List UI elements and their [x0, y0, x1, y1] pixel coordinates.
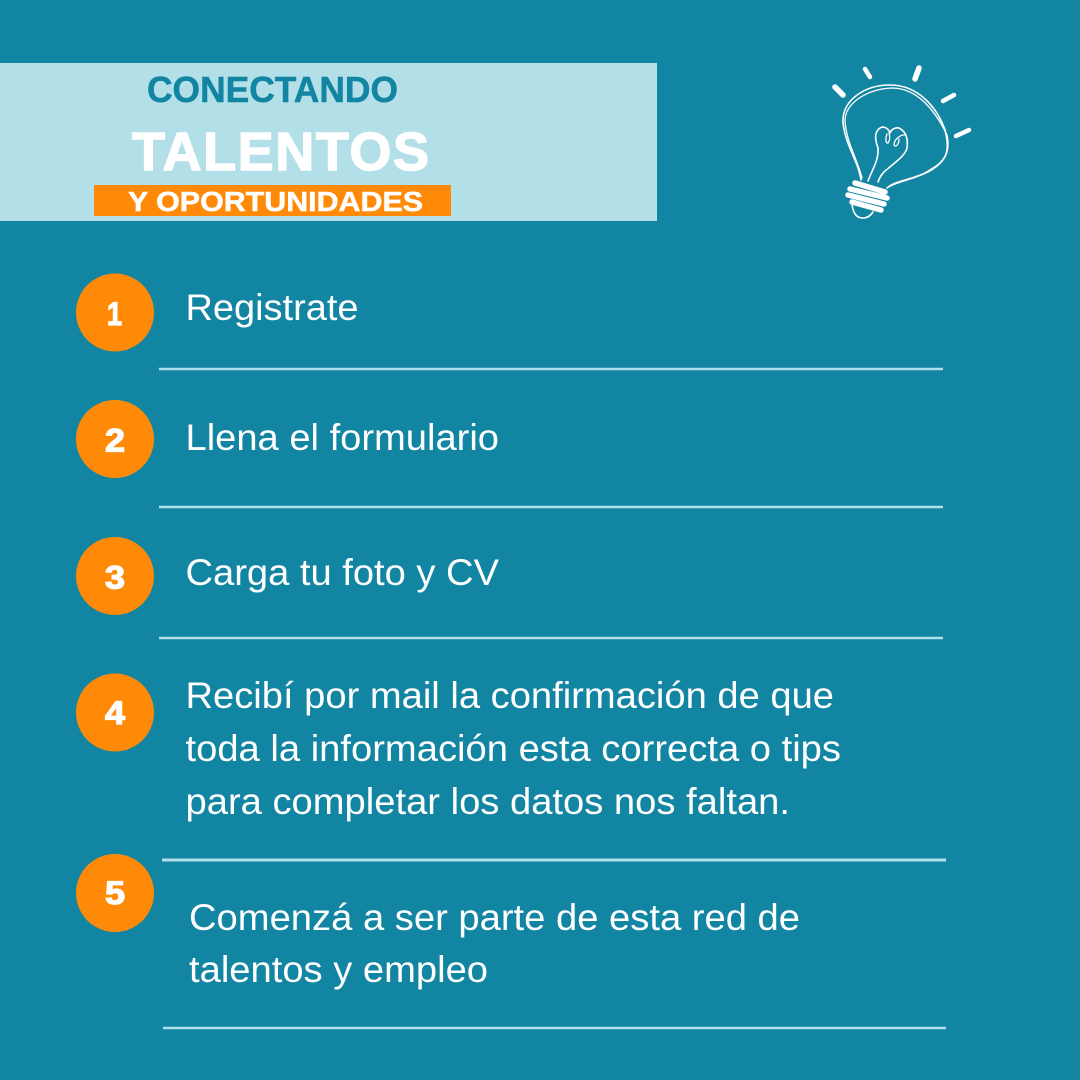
heading: conectando: CONECTANDO — [147, 69, 398, 110]
step 5: talentos y empleo — [189, 948, 488, 990]
header panel — [0, 63, 657, 221]
step 3: Carga tu foto y CV — [186, 551, 499, 593]
step 1: Registrate — [186, 286, 358, 328]
step 5: 5 — [105, 875, 125, 911]
step 3 — [76, 537, 499, 615]
step 1 — [76, 274, 358, 352]
heading: talentos: TALENTOS — [132, 122, 429, 182]
step 4: toda la información esta correcta o tips — [186, 727, 841, 769]
step 3: 3 — [105, 560, 125, 596]
orange banner: Y OPORTUNIDADES — [128, 186, 423, 217]
step 1: 1 — [107, 296, 122, 332]
step 2: Llena el formulario — [186, 416, 499, 458]
step 4 — [76, 674, 841, 822]
step 2 — [76, 400, 499, 478]
step 4: 4 — [105, 695, 125, 731]
step 4: para completar los datos nos faltan. — [186, 780, 790, 822]
step 4: Recibí por mail la confirmación de que — [186, 674, 834, 716]
step 5 — [76, 854, 800, 990]
icon: light bulb — [835, 68, 969, 218]
step 5: Comenzá a ser parte de esta red de — [189, 896, 800, 938]
step 2: 2 — [105, 422, 125, 458]
